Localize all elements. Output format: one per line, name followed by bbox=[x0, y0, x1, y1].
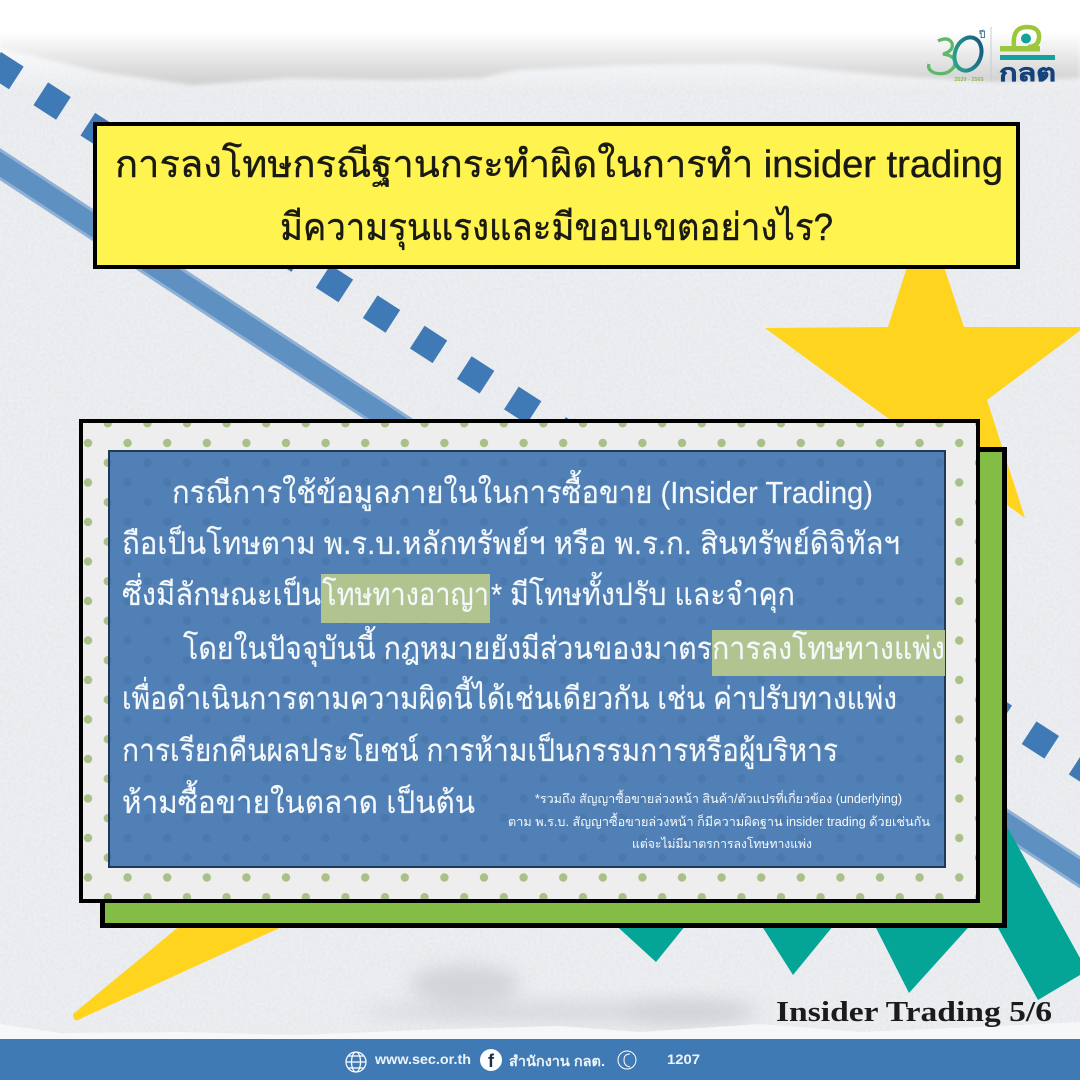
icon: phone bbox=[618, 1051, 636, 1069]
website: www.sec.or.th bbox=[374, 1051, 471, 1067]
solid diagonal blue band bbox=[0, 151, 1080, 892]
footer bar bbox=[0, 1039, 1080, 1080]
body text: โดยในปัจจุบันนี้ กฎหมายยังมีส่วนของมาตร bbox=[183, 626, 712, 668]
body text: เพื่อดำเนินการตามความผิดนี้ได้เช่นเดียวกัน เช่น ค่าปรับทางแพ่ง bbox=[122, 676, 897, 716]
title box bbox=[95, 124, 1018, 267]
highlight: criminal offence bbox=[321, 574, 490, 623]
body text: ห้ามซื้อขายในตลาด เป็นต้น bbox=[122, 780, 475, 820]
body text: ซึ่งมีลักษณะเป็น bbox=[122, 573, 321, 612]
body text: ถือเป็นโทษตาม พ.ร.บ.หลักทรัพย์ฯ หรือ พ.ร.ก. สินทรัพย์ดิจิทัลฯ bbox=[122, 525, 900, 561]
body text: โทษทางอาญา bbox=[322, 577, 489, 612]
main dotted panel bbox=[81, 421, 978, 901]
green backing panel bbox=[102, 450, 1004, 926]
series label: Insider Trading 5/6 bbox=[776, 996, 1052, 1028]
highlight: civil sanction bbox=[712, 630, 945, 676]
icon: facebook: f bbox=[488, 1051, 495, 1071]
title line 1: การลงโทษกรณีฐานกระทำผิดในการทำ insider trading bbox=[115, 142, 1003, 187]
logo: 30 years anniversary: 2539 - 2565 bbox=[954, 77, 984, 83]
footnote: แต่จะไม่มีมาตรการลงโทษทางแพ่ง bbox=[632, 836, 812, 851]
logo: 30 years anniversary bbox=[929, 29, 986, 83]
blue content panel bbox=[109, 451, 945, 867]
dashed diagonal blue line bbox=[0, 58, 1080, 785]
yellow star bbox=[765, 210, 1080, 518]
logo: 30 years anniversary: ปี bbox=[978, 29, 985, 41]
hotline: 1207 bbox=[667, 1051, 700, 1067]
footnote: ตาม พ.ร.บ. สัญญาซื้อขายล่วงหน้า ก็มีความผิดฐาน insider trading ด้วยเช่นกัน bbox=[508, 812, 930, 829]
icon: facebook bbox=[480, 1049, 502, 1071]
yellow shard bottom left bbox=[73, 920, 297, 1020]
footnote: *รวมถึง สัญญาซื้อขายล่วงหน้า สินค้า/ตัวแปรที่เกี่ยวข้อง (underlying) bbox=[535, 789, 902, 806]
body text: การลงโทษทางแพ่ง bbox=[712, 631, 945, 666]
footnote bbox=[508, 789, 930, 851]
logo: SEC bbox=[999, 27, 1056, 87]
icon: globe bbox=[346, 1052, 366, 1072]
logo: SEC: กลต bbox=[999, 60, 1056, 87]
teal triangles bbox=[610, 805, 1080, 1000]
body text: การเรียกคืนผลประโยชน์ การห้ามเป็นกรรมการหรือผู้บริหาร bbox=[122, 732, 838, 769]
facebook page name: สำนักงาน กลต. bbox=[509, 1053, 605, 1069]
title line 2: มีความรุนแรงและมีขอบเขตอย่างไร? bbox=[280, 206, 833, 250]
body text: กรณีการใช้ข้อมูลภายในในการซื้อขาย (Insider Trading) bbox=[172, 470, 873, 511]
body text: * มีโทษทั้งปรับ และจำคุก bbox=[491, 572, 795, 614]
logo divider bbox=[990, 27, 992, 81]
body text bbox=[122, 470, 945, 820]
